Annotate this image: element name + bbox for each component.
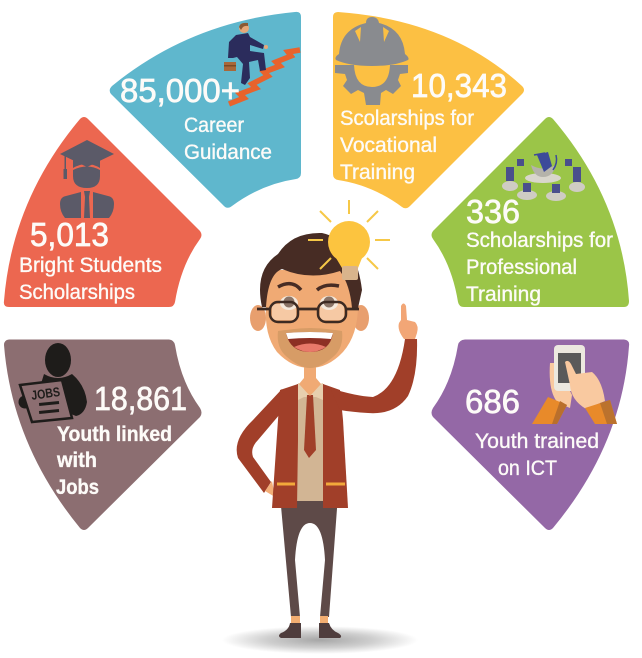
stat: 85,000+: 85,000+ bbox=[120, 72, 240, 109]
panel: youth trained on ICT bbox=[432, 340, 629, 530]
label: scholarships for professional training: Professional bbox=[466, 256, 577, 279]
pockets bbox=[277, 482, 345, 486]
label: youth linked with jobs: Youth linked bbox=[57, 423, 172, 446]
shirt bbox=[297, 384, 324, 501]
shoes bbox=[279, 623, 341, 638]
label: scholarships for vocational training: Training bbox=[340, 161, 415, 184]
jacket right bbox=[323, 384, 348, 508]
jacket left bbox=[272, 384, 298, 508]
label: youth linked with jobs: Jobs bbox=[56, 476, 99, 499]
label: youth trained on ICT: Youth trained bbox=[475, 430, 599, 453]
socks bbox=[291, 616, 328, 623]
panel: vocational training scholarships bbox=[333, 12, 524, 208]
label: scholarships for vocational training: Vocational bbox=[340, 134, 437, 157]
left arm bbox=[237, 389, 282, 493]
label: youth linked with jobs: with bbox=[56, 449, 97, 472]
icon: graduate silhouette bbox=[60, 140, 114, 218]
panel: youth linked with jobs bbox=[4, 340, 202, 530]
right arm bbox=[330, 339, 417, 413]
face bbox=[266, 270, 358, 368]
glasses bbox=[257, 296, 359, 322]
label: bright students scholarships: Bright Students bbox=[19, 254, 162, 277]
label: scholarships for professional training: Training bbox=[466, 283, 541, 306]
trousers bbox=[280, 495, 338, 617]
label: bright students scholarships: Scholarships bbox=[19, 281, 135, 304]
neck bbox=[299, 362, 321, 396]
label: scholarships for professional training: Scholarships for bbox=[466, 229, 613, 252]
ground shadow bbox=[222, 626, 418, 654]
icon: hard hat and gear bbox=[335, 17, 409, 105]
label: career guidance: Guidance bbox=[184, 141, 272, 164]
hair bbox=[260, 233, 362, 308]
stat: 336: 336 bbox=[466, 193, 520, 230]
hair highlights bbox=[308, 240, 331, 269]
collar bbox=[298, 383, 323, 400]
character: man with idea bbox=[237, 200, 418, 638]
light rays bbox=[320, 200, 390, 269]
label: youth trained on ICT: on ICT bbox=[498, 457, 557, 480]
panel: career guidance bbox=[110, 12, 301, 208]
label: career guidance: Career bbox=[184, 114, 244, 137]
tie bbox=[304, 395, 316, 458]
icon: hands holding smartphone bbox=[532, 345, 617, 424]
stat: 5,013: 5,013 bbox=[30, 216, 109, 253]
icon: globe and networked computers bbox=[502, 152, 585, 201]
icon: person holding jobs sign bbox=[18, 343, 87, 422]
icon: person holding jobs sign: JOBS bbox=[30, 384, 61, 403]
ears bbox=[250, 305, 266, 331]
panel: professional training scholarships bbox=[432, 117, 629, 307]
eyebrows bbox=[278, 284, 339, 290]
panel: bright students scholarships bbox=[4, 117, 201, 307]
icon: businessman climbing stairs bbox=[224, 23, 300, 104]
stat: 10,343: 10,343 bbox=[411, 67, 507, 104]
beard bbox=[278, 328, 342, 368]
light bulb bbox=[328, 221, 370, 280]
right hand pointing bbox=[399, 304, 418, 339]
stat: 686: 686 bbox=[465, 383, 520, 420]
stat: 18,861: 18,861 bbox=[94, 380, 187, 417]
label: scholarships for vocational training: Scolarships for bbox=[340, 107, 474, 130]
mouth bbox=[286, 332, 333, 352]
left hand bbox=[265, 481, 275, 497]
